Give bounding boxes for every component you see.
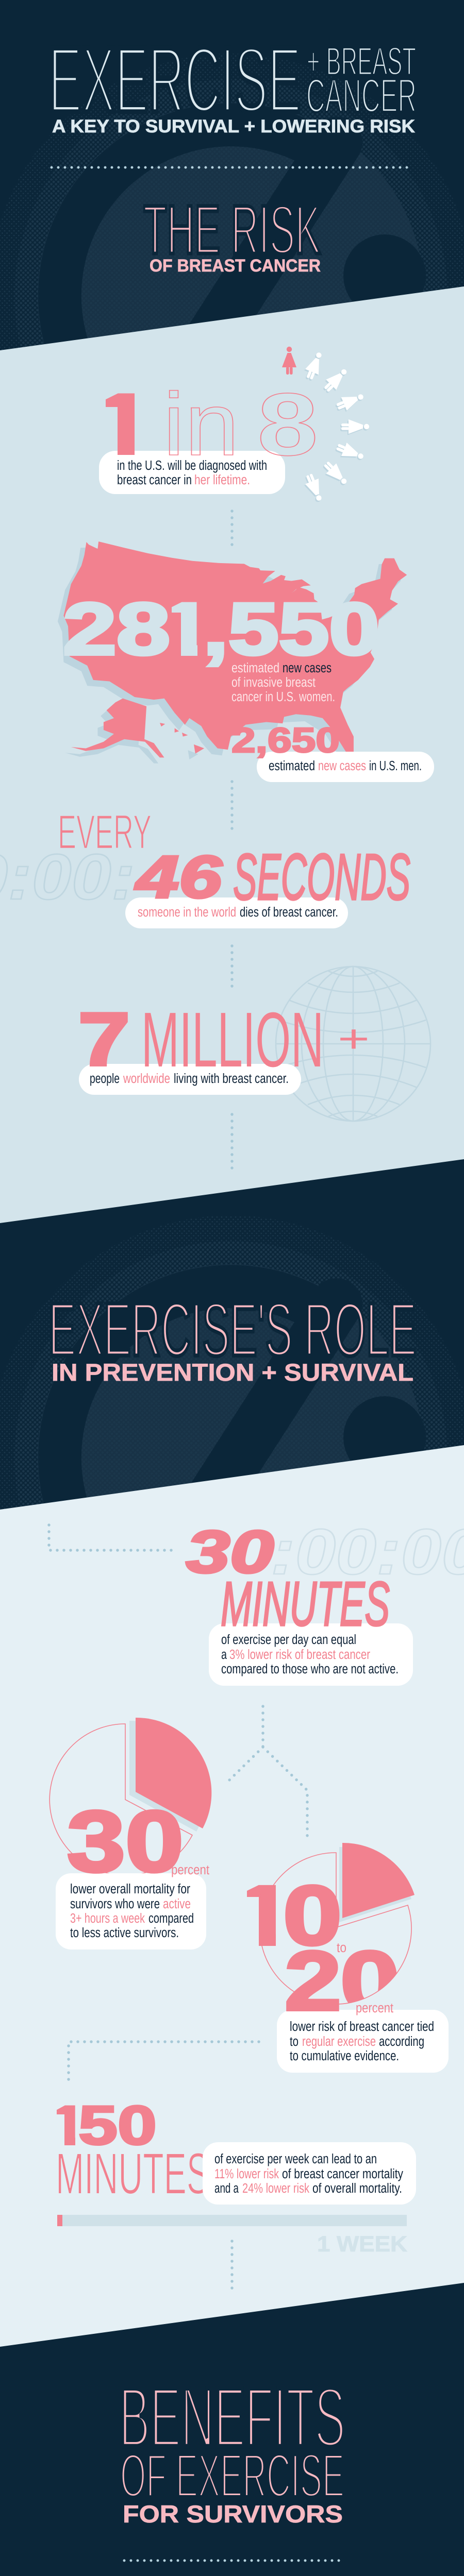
stat: 281,550 [64,601,377,702]
callout text: in the U.S. will be diagnosed with [117,459,267,473]
callout text [138,905,338,920]
big number: ,550 [203,588,379,670]
label: 1 week: 1 WEEK [317,2232,407,2257]
callout text: regular exercise [302,2035,376,2049]
icon: globe [276,967,430,1121]
callout text: lower risk of breast cancer tied [290,2020,434,2034]
callout text: according [379,2035,424,2049]
callout text: 3% lower risk of breast cancer [229,1648,370,1662]
callout text [117,459,267,487]
dotted connector: branching [228,1706,307,1842]
dotted connector [230,946,234,990]
number 30: 30 [186,1518,274,1585]
callout text: dies of breast cancer. [240,905,338,920]
caption: cancer in U.S. women. [231,690,335,704]
callout pill [79,1064,301,1095]
callout text [90,1072,289,1086]
callout text: a [221,1648,227,1662]
callout text [290,2020,434,2063]
callout pill [99,451,285,494]
dotted connector [230,782,234,835]
callout pill [209,1623,413,1686]
stat: 30 minutes [186,1516,464,1686]
dotted connector [49,1525,175,1550]
stat: 1 in 8 [99,389,316,494]
map of the United States [58,541,407,764]
pie slice [136,1718,211,1828]
callout text: compared to those who are not active. [221,1662,399,1676]
halftone logo watermark: header [0,54,464,350]
stat: 150 minutes [57,2105,416,2251]
heading: the risk: THE RISK [143,192,321,268]
stat: 10 to 20 percent pie chart [233,1843,449,2073]
callout pill [203,2142,416,2205]
word every: EVERY [58,805,152,859]
mainland [63,541,407,752]
callout text: survivors who were [70,1897,160,1911]
pie slice shadow [339,1847,411,1922]
plus sign: + [338,1017,370,1061]
callout pill [257,752,434,782]
callout text [214,2152,403,2196]
number 1 of 150: 1 [49,2094,86,2156]
callout text: of exercise per day can equal [221,1633,356,1647]
number 30: 30 [67,1793,184,1890]
callout text: to less active survivors. [70,1926,179,1940]
heading: the risk [143,192,321,276]
dotted divider [52,166,413,169]
hawaii [160,723,204,754]
number 46: 46 [135,843,223,910]
callout text: her lifetime. [194,473,250,487]
panel: the risk background [0,286,464,1223]
percent label: percent [356,2001,393,2015]
number 1 of 10: 1 [233,1868,294,1962]
subtitle: A KEY TO SURVIVAL + LOWERING RISK [52,116,415,137]
callout text: to cumulative evidence. [290,2049,399,2063]
callout pill [277,2010,449,2073]
sub heading: FOR SURVIVORS [123,2500,343,2528]
number 0 clipped to pie: 0 [340,1934,400,2028]
outlined number 8: 8 [257,375,318,474]
number 0 of 10: 0 [283,1868,342,1962]
callout pill [56,1873,206,1950]
sub heading: OF BREAST CANCER [150,256,321,276]
map shadow [58,547,401,764]
big number: 1 [159,588,212,670]
word million: MILLION [141,996,324,1083]
callout text [269,759,422,773]
heading: benefits [119,2370,345,2528]
callout pill [125,897,348,928]
callout text: active [163,1897,191,1911]
caption: estimated [231,661,279,675]
word minutes: MINUTES [56,2141,209,2206]
number 50 of 150: 50 [78,2094,157,2156]
dotted connector [230,511,234,545]
panel: exercise's role background [0,1445,464,2347]
callout text: people [90,1072,120,1086]
caption [231,661,335,704]
callout text: lower overall mortality for [70,1882,190,1896]
word to: to [337,1941,346,1955]
number 2: 2 [285,1934,341,2028]
stat: 2,650 [231,721,434,782]
callout text: someone in the world [138,905,236,920]
callout text: of breast cancer mortality [282,2167,403,2181]
icon: ring of eight women [282,347,369,504]
callout text: 3+ hours a week [70,1911,145,1926]
big number: 28 [63,588,170,670]
callout text: breast cancer in [117,473,192,487]
alaska [71,699,164,757]
callout text: to [290,2035,299,2049]
halftone logo watermark: benefits [0,2283,464,2576]
ghost clock digits: :00:00 [271,1516,464,1588]
callout text: living with breast cancer. [174,1072,289,1086]
callout text [221,1633,399,1676]
callout text: of overall mortality. [312,2181,402,2196]
big number: 2,650 [231,721,340,760]
pie outline [49,1724,192,1875]
callout text: estimated [269,759,315,773]
callout text: worldwide [123,1072,170,1086]
stat: 7 million + [78,996,370,1095]
dotted connector [230,1114,234,1170]
callout text: 24% lower risk [242,2181,309,2196]
callout text [70,1882,194,1940]
stat: every 46 seconds [0,805,410,928]
pie slice shadow [129,1721,205,1832]
callout text: compared [148,1911,194,1926]
halftone logo watermark: exercise's role [0,1216,464,1510]
number 7: 7 [78,997,130,1081]
big number [64,601,377,668]
callout text: new cases [318,759,366,773]
callout text: in U.S. men. [369,759,422,773]
callout text: of exercise per week can lead to an [214,2152,377,2166]
dotted connector [69,2042,259,2086]
outlined word in: in [163,374,239,474]
sub heading: IN PREVENTION + SURVIVAL [52,1359,413,1386]
callout text: 11% lower risk [214,2167,279,2181]
dotted connector [230,2241,234,2294]
percent label: percent [171,1863,209,1877]
one week progress bar [57,2215,407,2226]
dotted divider [124,2560,344,2562]
callout text: and a [214,2181,239,2196]
title [48,28,417,137]
stat: 30 percent pie chart [49,1718,211,1950]
caption: of invasive breast [231,675,316,690]
pie slice [342,1843,415,1918]
pie outline [260,1853,411,2004]
caption: new cases [283,661,332,675]
big number 1: 1 [92,377,154,471]
